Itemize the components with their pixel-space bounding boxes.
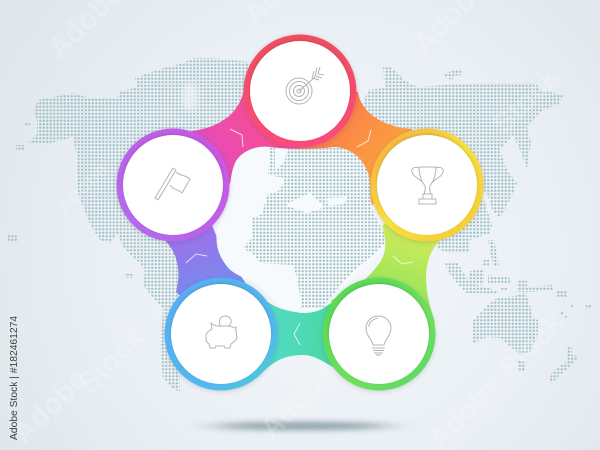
shadow under diagram bbox=[214, 422, 390, 430]
chevrons bbox=[186, 129, 413, 345]
watermarks: Stock bbox=[487, 61, 566, 140]
connector: blue to purple bbox=[150, 185, 245, 334]
disc: green bbox=[329, 284, 429, 384]
circle: flag bbox=[116, 128, 230, 242]
new zealand bbox=[549, 347, 579, 383]
ring: green bbox=[322, 278, 436, 390]
north and south america bbox=[28, 58, 250, 392]
pale patch over map bbox=[182, 83, 198, 111]
connector: green to blue bbox=[221, 278, 379, 377]
disc: purple bbox=[123, 135, 223, 235]
connector: red to yellow bbox=[300, 91, 427, 205]
connector: purple to red bbox=[173, 85, 300, 190]
world map dots bbox=[8, 58, 591, 392]
icon: piggy bank bbox=[206, 316, 237, 348]
watermarks: Adobe bbox=[254, 359, 341, 445]
connector: yellow to green bbox=[330, 185, 442, 334]
watermarks: Adobe bbox=[53, 159, 113, 219]
icon: lightbulb bbox=[366, 316, 391, 355]
ring: purple bbox=[116, 128, 230, 242]
asia bbox=[360, 66, 563, 253]
ring: yellow bbox=[370, 128, 484, 242]
stock id caption: Adobe Stock | #182461274 bbox=[9, 316, 20, 440]
ring: red bbox=[244, 34, 356, 148]
icon: flag bbox=[155, 168, 190, 200]
circle: target bbox=[244, 34, 356, 148]
watermarks: Stock bbox=[337, 291, 416, 370]
disc: yellow bbox=[377, 135, 477, 235]
ring: blue bbox=[164, 278, 278, 390]
circle: lightbulb bbox=[322, 278, 436, 390]
watermarks: Stock bbox=[72, 321, 151, 400]
circle: trophy bbox=[370, 128, 484, 242]
disc: blue bbox=[171, 284, 271, 384]
centre blob bbox=[216, 147, 385, 313]
icon: target with arrow bbox=[286, 67, 324, 104]
watermarks: Adobe bbox=[7, 364, 94, 450]
australia bbox=[472, 292, 538, 371]
connectors bbox=[150, 85, 442, 377]
circle: piggy bank bbox=[164, 278, 278, 390]
icon: trophy bbox=[412, 167, 443, 204]
europe and africa dots bbox=[243, 148, 388, 308]
asian islands bbox=[443, 70, 591, 319]
small american islands bbox=[8, 122, 133, 278]
disc: red bbox=[250, 41, 350, 141]
